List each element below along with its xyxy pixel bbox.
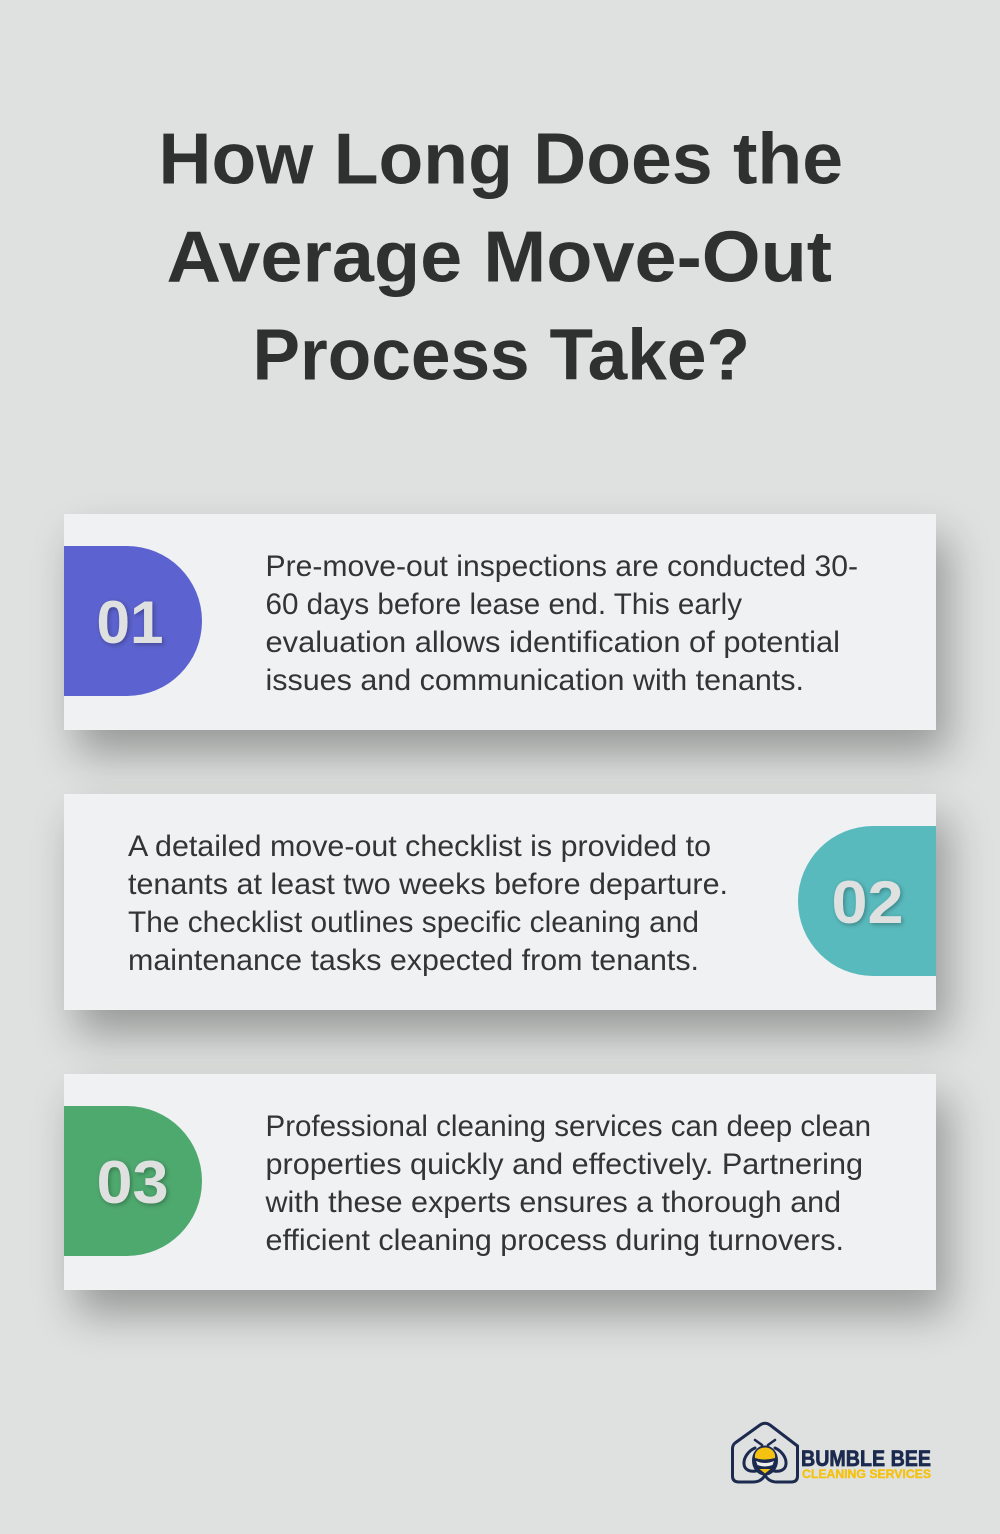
- panel: step 3 card: [64, 1074, 936, 1290]
- badge: step 03: [64, 1106, 202, 1256]
- title: Average Move-Out: [166, 218, 832, 298]
- text: step 2 description: The checklist outlines specific cleaning and: [128, 906, 699, 939]
- badge: step 03: 03: [96, 1149, 168, 1216]
- badge: step 02: [798, 826, 936, 976]
- logo: Bumble Bee Cleaning Services: [732, 1423, 931, 1482]
- text: step 2 description: A detailed move-out checklist is provided to: [128, 830, 711, 863]
- text: step 2 description: tenants at least two weeks before departure.: [128, 868, 728, 901]
- text: step 1 description: Pre-move-out inspections are conducted 30-: [266, 550, 858, 583]
- panel: step 1 card: [64, 514, 936, 730]
- icon: house outline with bee: [732, 1423, 798, 1482]
- text: step 1 description: [266, 550, 858, 697]
- logo tagline: CLEANING SERVICES: [802, 1467, 931, 1481]
- title: How Long Does the: [158, 120, 843, 200]
- logo wordmark: BUMBLE BEE: [801, 1446, 931, 1471]
- title: Process Take?: [252, 316, 750, 396]
- badge: step 01: [64, 546, 202, 696]
- text: step 2 description: maintenance tasks expected from tenants.: [128, 944, 699, 977]
- title: [158, 120, 843, 396]
- badge: step 02: 02: [832, 869, 904, 936]
- text: step 2 description: [128, 830, 728, 977]
- text: step 1 description: issues and communication with tenants.: [266, 664, 804, 697]
- text: step 3 description: [264, 1110, 871, 1257]
- panel: step 2 card: [64, 794, 936, 1010]
- text: step 3 description: efficient cleaning process during turnovers.: [266, 1224, 844, 1257]
- text: step 1 description: evaluation allows identification of potential: [266, 626, 840, 659]
- badge: step 01: 01: [96, 589, 164, 656]
- text: step 1 description: 60 days before lease end. This early: [266, 588, 742, 621]
- text: step 3 description: properties quickly and effectively. Partnering: [266, 1148, 863, 1181]
- text: step 3 description: with these experts ensures a thorough and: [264, 1186, 841, 1219]
- text: step 3 description: Professional cleaning services can deep clean: [266, 1110, 871, 1143]
